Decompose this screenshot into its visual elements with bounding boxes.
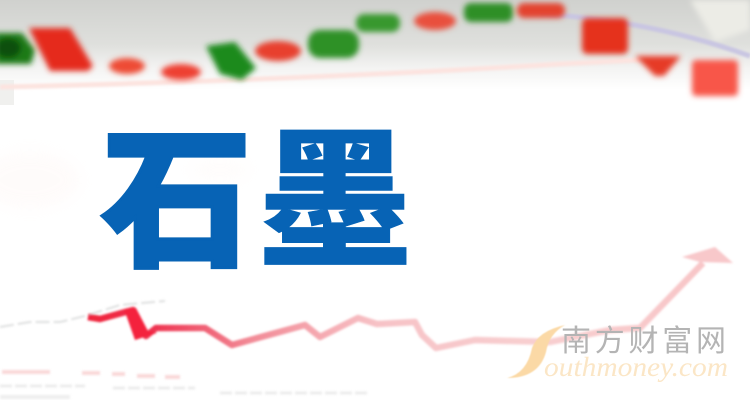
faint red smudges behind the title — [0, 152, 250, 208]
title: 石 — [101, 80, 252, 298]
top blurred backdrop — [0, 0, 750, 105]
watermark logo: southmoney: 南方财富网 — [561, 316, 726, 360]
candlestick chart: blurred candles — [0, 3, 738, 96]
title — [101, 77, 412, 300]
title: 墨 — [258, 77, 412, 300]
watermark logo: southmoney: outhmoney.com — [544, 352, 728, 382]
line chart with rising arrow — [88, 247, 733, 348]
icon: orange S swoosh — [507, 325, 565, 378]
blurred chart captions bottom-left — [0, 301, 370, 397]
watermark logo: southmoney — [507, 316, 728, 382]
